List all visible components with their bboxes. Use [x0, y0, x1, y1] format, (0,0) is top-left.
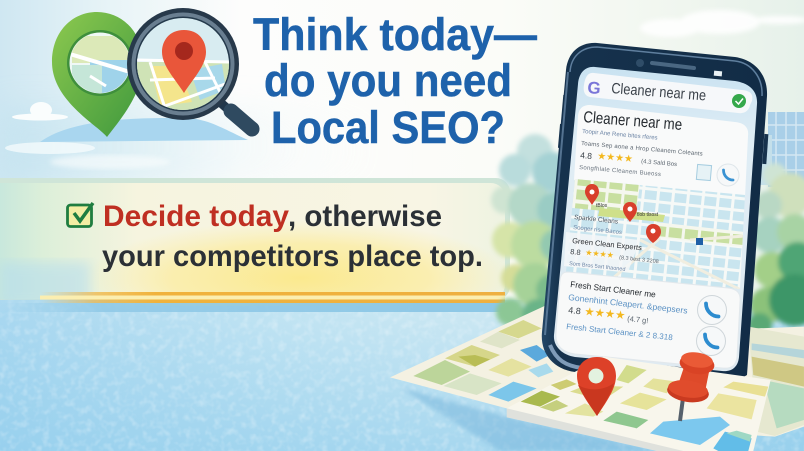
top result card [574, 105, 748, 197]
map: back sheet [390, 305, 804, 451]
bottom result card: Gonenhint Cleapert. &peepsers [568, 292, 688, 316]
background: clouds upper right [640, 10, 804, 37]
front camera and speaker [636, 59, 722, 76]
call to action text [102, 200, 483, 273]
listing labels over map: Sooger rise Bacos [573, 225, 622, 236]
magnifying glass icon [127, 8, 252, 129]
top result card: (4.3 Sald Bos [641, 159, 677, 168]
map pins in phone: tBlos [596, 203, 608, 209]
phone screen [554, 67, 757, 371]
bottom result card: Fresh Start Cleaner & 2 8.318 [566, 322, 674, 342]
band underline stripes [0, 292, 510, 312]
search bar: Cleaner near me [611, 80, 707, 104]
call to action text: , otherwise [288, 200, 442, 233]
clipboard icon [696, 164, 712, 181]
phone call button [717, 164, 739, 186]
map in phone [566, 179, 745, 289]
listing labels over map: (8.3 best 3 2208 [619, 255, 659, 265]
title: Think today— [253, 9, 537, 60]
google logo: G [587, 78, 601, 98]
red location pin inside the lens [162, 30, 206, 93]
red location pin on map [577, 357, 616, 416]
call to action text: your competitors place top. [102, 240, 483, 273]
top result card: 4.8 [580, 150, 593, 161]
bottom result card: Fresh Start Cleaner me [570, 279, 657, 299]
listing labels over map [564, 214, 659, 273]
text band [0, 178, 510, 306]
bottom result card: (4.7 g! [627, 314, 649, 325]
background: city building [748, 112, 804, 187]
map pins in phone: tlob tlsost [637, 212, 659, 218]
top result card: ★★★★ [597, 151, 633, 165]
magnifier handle [221, 103, 252, 129]
phone body [542, 43, 767, 382]
phone buttons [558, 95, 768, 164]
green check badge [732, 94, 746, 108]
listing labels over map: ★★★★ [585, 248, 614, 260]
title [253, 9, 537, 153]
background: foliage left of the phone [491, 134, 573, 331]
search bar [584, 73, 752, 113]
map pins in phone [585, 184, 703, 245]
call to action text: Decide today [103, 200, 289, 233]
red push pin on map [666, 350, 716, 421]
top result card: Toams Sep aone a Hrop Cleanem Coleants [581, 141, 703, 158]
bottom result card: ★★★★ [584, 306, 626, 322]
call buttons [698, 296, 726, 324]
background: foliage right of the phone [748, 163, 804, 337]
map: front sheet [507, 357, 771, 451]
back map shadow [400, 387, 657, 451]
listing labels over map: Som Bros 5art Ihaoned [569, 261, 626, 273]
background: sky [0, 0, 804, 310]
bottom result card [556, 272, 740, 368]
top result card: Cleaner near me [583, 109, 683, 134]
background: clouds at left [5, 102, 170, 169]
listing labels over map: Sparkle Cleans [574, 214, 619, 226]
title: Local SEO? [271, 102, 505, 153]
top result card: Toopir Ane Rene bites rferes [582, 129, 658, 142]
background: blue shadow under pins [40, 118, 248, 142]
checkbox icon [68, 203, 93, 226]
top result card: Songfhlale Cleanem Bueoss [579, 165, 661, 178]
bottom result card: 4.8 [568, 305, 581, 316]
background: water [0, 300, 804, 451]
smartphone [542, 43, 768, 382]
listing labels over map: Green Clean Experts [572, 236, 643, 252]
listing labels over map: 8.8 [570, 247, 581, 257]
green map pin icon [52, 12, 143, 137]
title: do you need [264, 55, 512, 106]
